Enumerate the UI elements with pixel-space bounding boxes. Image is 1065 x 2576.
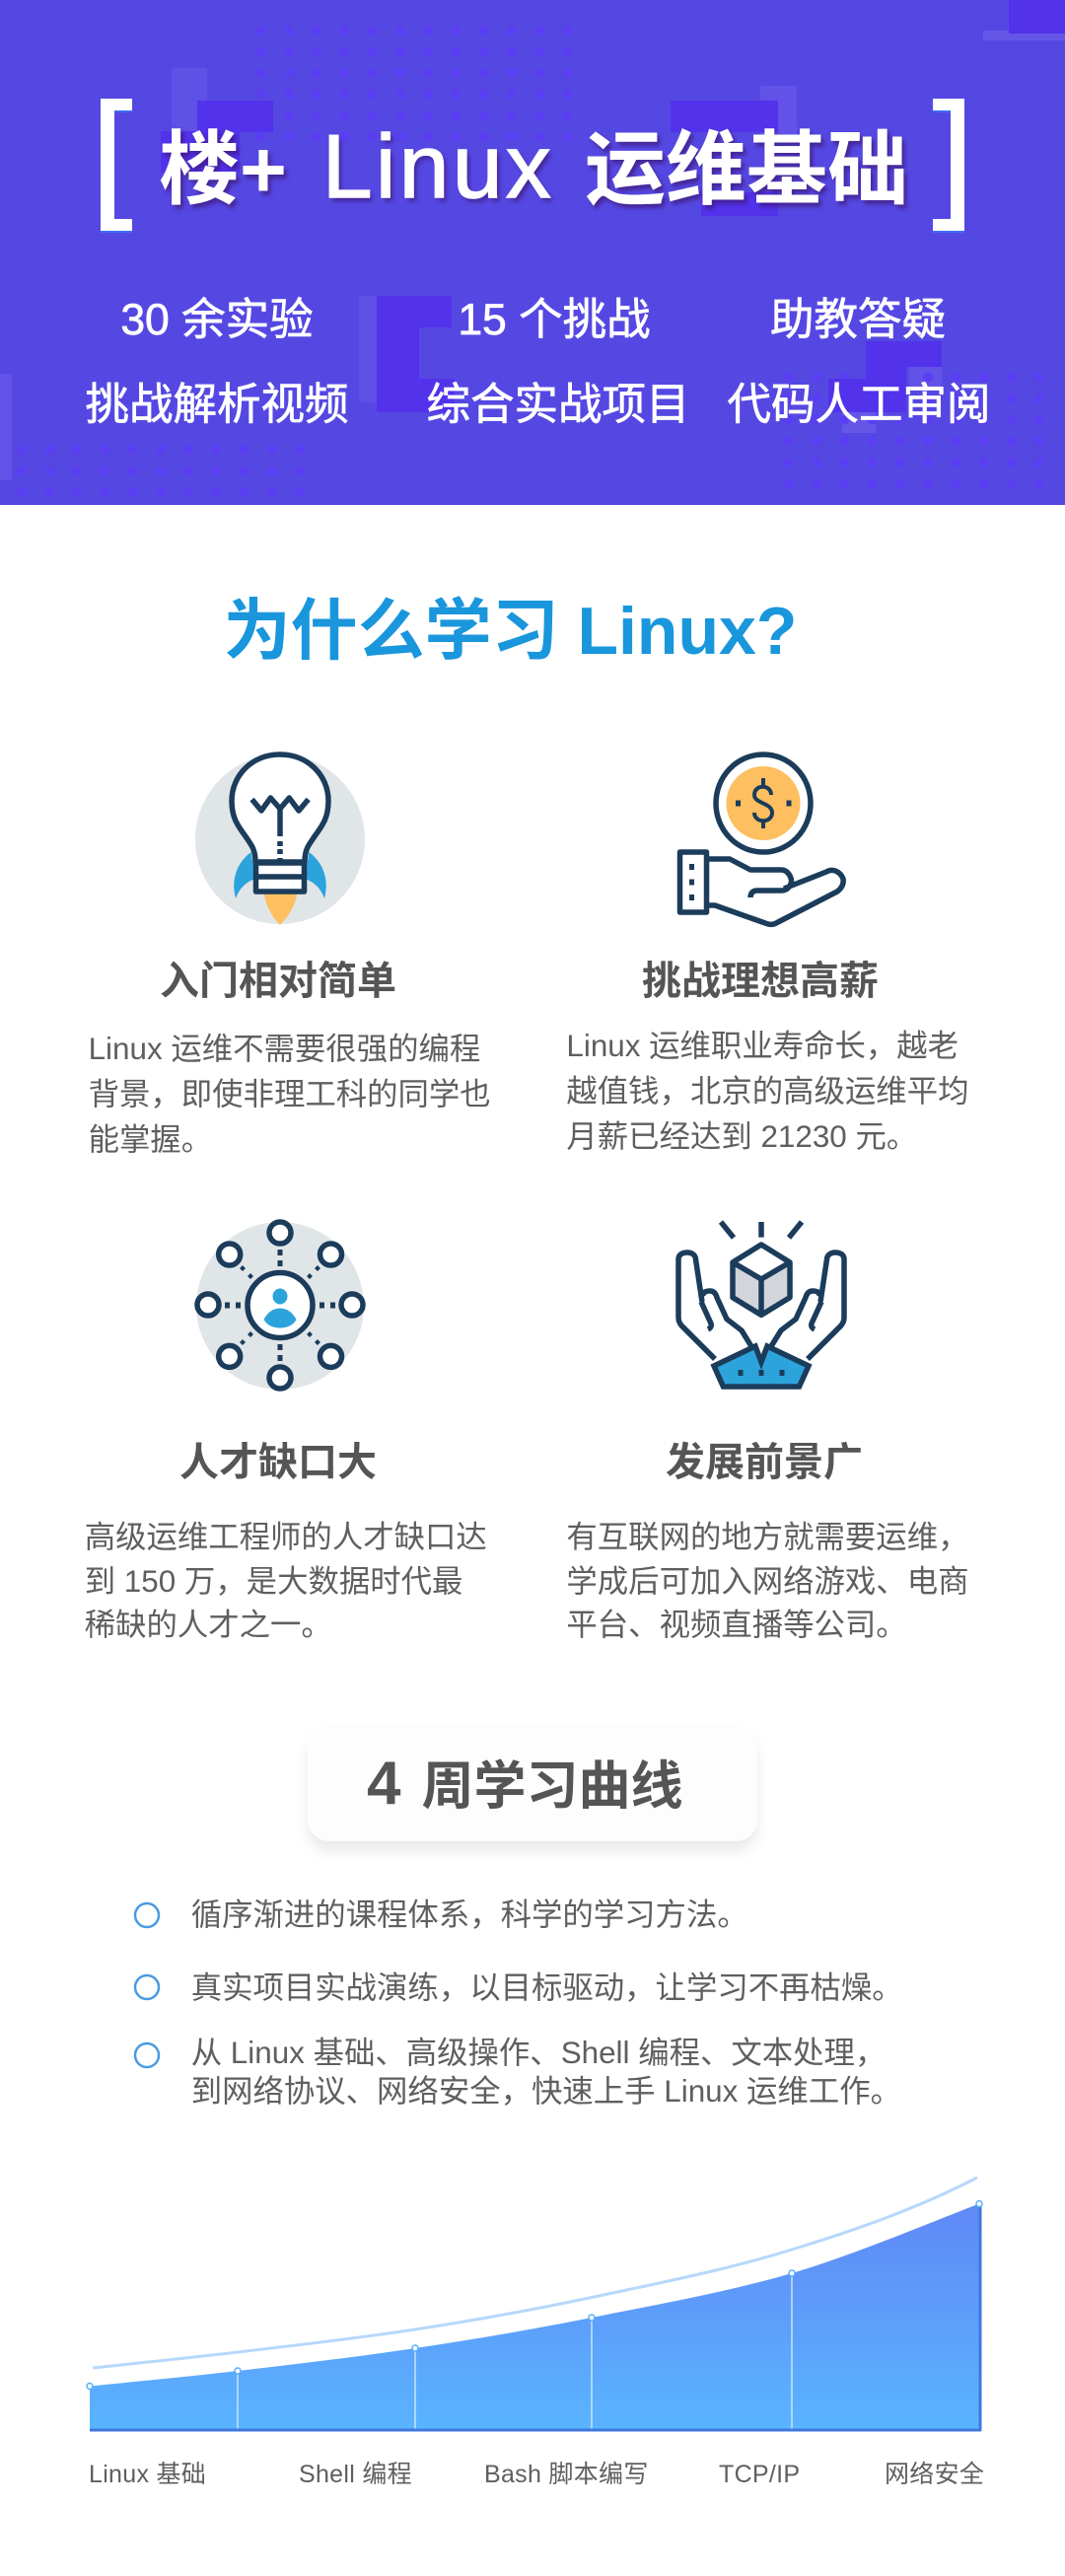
feature: code review: 代码人工审阅 [727, 381, 990, 429]
heading: broad prospects: 发展前景广 [666, 1441, 863, 1484]
upper curve [93, 2178, 977, 2368]
label: Shell programming: Shell 编程 [299, 2461, 412, 2488]
heading: talent gap: 人才缺口大 [179, 1441, 377, 1484]
text: broad prospects [566, 1520, 968, 1642]
bullet text 3: 从 Linux 基础、高级操作、Shell 编程、文本处理， [191, 2036, 886, 2070]
heading: why learn Linux: 为什么学习 Linux? [224, 594, 797, 669]
text: talent gap: 高级运维工程师的人才缺口达 [85, 1520, 487, 1554]
feature: 15 challenges: 15 个挑战 [458, 296, 651, 344]
text: high salary: 越值钱，北京的高级运维平均 [566, 1074, 968, 1109]
heading: high salary: 挑战理想高薪 [642, 960, 879, 1003]
panel: high salary [566, 751, 968, 1154]
section title card [308, 1726, 757, 1841]
bullet text 3: 到网络协议、网络安全，快速上手 Linux 运维工作。 [191, 2074, 901, 2109]
section title: 4 周学习曲线 [367, 1750, 682, 1818]
text: high salary [566, 1029, 968, 1154]
feature: 30 experiments: 30 余实验 [120, 296, 314, 344]
right bracket [933, 99, 964, 233]
axis lines [238, 2273, 792, 2430]
baseline [90, 2205, 981, 2431]
text: talent gap: 到 150 万，是大数据时代最 [85, 1564, 462, 1598]
text: easy to start [89, 1032, 491, 1157]
label: Linux basics: Linux 基础 [89, 2461, 206, 2488]
text: broad prospects: 有互联网的地方就需要运维， [566, 1520, 968, 1554]
feature: teaching assistant: 助教答疑 [770, 296, 946, 344]
data points [87, 2201, 982, 2389]
bullet text 2: 真实项目实战演练，以目标驱动，让学习不再枯燥。 [191, 1970, 903, 2005]
bullet text 3 [191, 2036, 901, 2109]
icon: hands holding cube [675, 1220, 847, 1390]
text: broad prospects: 学成后可加入网络游戏、电商 [566, 1564, 968, 1598]
label: Bash scripting: Bash 脚本编写 [484, 2461, 649, 2488]
icon: light bulb rocket [195, 751, 365, 925]
feature: practical project: 综合实战项目 [426, 381, 690, 429]
panel: easy to start [89, 751, 491, 1157]
text: high salary: 月薪已经达到 21230 元。 [566, 1119, 917, 1154]
label: TCP/IP: TCP/IP [719, 2461, 800, 2488]
bullet list [134, 1897, 903, 2109]
panel: talent gap [85, 1219, 487, 1642]
bullet text 1: 循序渐进的课程体系，科学的学习方法。 [191, 1897, 748, 1932]
icon: hand holding coin [676, 751, 846, 927]
bullet marker 3 [134, 2041, 160, 2069]
text: easy to start: 背景，即使非理工科的同学也 [89, 1077, 491, 1111]
panel: broad prospects [566, 1220, 968, 1642]
panel: purple banner [0, 0, 1065, 505]
text: talent gap: 稀缺的人才之一。 [85, 1608, 332, 1642]
banner background pattern [0, 0, 1065, 497]
bullet marker 1 [134, 1901, 160, 1929]
area fill [90, 2204, 979, 2430]
heading: easy to start: 入门相对简单 [160, 960, 396, 1003]
left bracket [101, 99, 132, 233]
icon: people network [194, 1219, 366, 1392]
text: broad prospects: 平台、视频直播等公司。 [566, 1608, 907, 1642]
text: talent gap [85, 1520, 487, 1642]
feature: challenge videos: 挑战解析视频 [85, 381, 349, 429]
learning curve chart [86, 2176, 983, 2432]
text: easy to start: Linux 运维不需要很强的编程 [89, 1032, 480, 1066]
text: high salary: Linux 运维职业寿命长，越老 [566, 1029, 958, 1063]
title: 楼+ Linux 运维基础 [159, 117, 908, 217]
bullet marker 2 [134, 1974, 160, 2000]
label: network security: 网络安全 [885, 2461, 984, 2488]
text: easy to start: 能掌握。 [89, 1122, 212, 1157]
